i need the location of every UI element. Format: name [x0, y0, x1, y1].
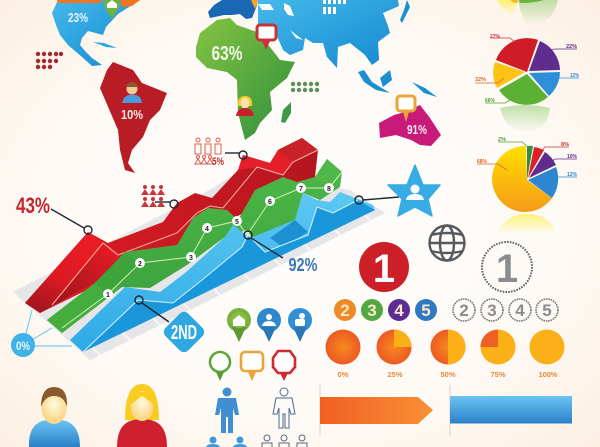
badge: 0% with leaders [11, 310, 72, 357]
numbered markers [103, 183, 334, 299]
numbered markers: 6 [268, 199, 272, 206]
colored numbers: 5 [421, 301, 431, 320]
south america [100, 62, 167, 173]
pie chart: five slices [475, 34, 579, 105]
pie labels: 66% [485, 98, 495, 104]
outlined numbers: 2 [459, 301, 469, 320]
australia [379, 105, 441, 146]
blue people row [206, 436, 247, 447]
numbered markers: 8 [327, 186, 331, 193]
arrow banner: orange [320, 397, 433, 424]
big red number 1: 1 [373, 247, 395, 291]
north america: 23% [68, 10, 88, 25]
badge: 0% with leaders: 0% [16, 339, 30, 353]
blue area [70, 192, 375, 352]
pie chart: yellow dominant [477, 137, 577, 212]
madagascar [281, 102, 291, 123]
colored numbers: 3 [367, 301, 377, 320]
avatar: man on south america [122, 82, 142, 103]
label 10%: 10% [121, 107, 143, 122]
pie labels: 12% [570, 73, 579, 79]
outlined numbers: 5 [542, 301, 552, 320]
numbered markers: 5 [235, 219, 239, 226]
avatar: woman on africa [236, 96, 254, 116]
dotted number 1: 1 [496, 247, 518, 291]
colored numbers: 2 [340, 301, 350, 320]
outline person icon [273, 388, 295, 428]
5% people group: 5% [212, 156, 224, 168]
outlined numbers: 3 [487, 301, 497, 320]
percent labels: 25% [388, 370, 403, 379]
5% people group [195, 138, 224, 168]
blue person pin [288, 308, 312, 342]
pie chart: top reflection [497, 0, 558, 25]
orange square pin [241, 352, 263, 381]
banner shadow lines [320, 385, 450, 436]
pie labels: 27% [490, 34, 500, 40]
label 92%: 92% [288, 255, 318, 275]
pie labels: 10% [567, 154, 577, 160]
blue person icon [215, 388, 239, 433]
blue people pin [257, 308, 281, 342]
world map [52, 0, 441, 173]
green home pin [227, 308, 251, 342]
green area [47, 159, 342, 333]
numbered markers: 1 [106, 292, 110, 299]
dots: red grid [36, 52, 63, 69]
pin on europe [251, 0, 258, 9]
pie labels: 22% [475, 77, 486, 83]
colored numbers: 4 [394, 301, 404, 320]
red people group [141, 185, 165, 207]
outline people row [262, 435, 307, 447]
pie labels: 12% [567, 172, 577, 178]
avatar: man [29, 387, 80, 447]
percent labels: 0% [338, 370, 349, 379]
red octagon pin [273, 351, 295, 381]
pie labels: 22% [566, 44, 577, 50]
dots: green stars [291, 82, 319, 92]
europe [208, 0, 258, 19]
globe icon [430, 226, 464, 260]
percent labels: 75% [490, 370, 506, 379]
numbered markers: 4 [205, 226, 209, 233]
pin on australia [397, 96, 415, 122]
star icon [388, 165, 440, 216]
badge: 2nd [161, 309, 207, 355]
label 43%: 43% [16, 193, 50, 218]
25 percent [376, 330, 412, 364]
pie reflection [500, 105, 550, 132]
asia [258, 0, 437, 97]
outlined numbers: 4 [515, 301, 525, 320]
0 percent [326, 330, 360, 364]
people icons on asia [323, 0, 346, 14]
outlined numbers [453, 299, 558, 321]
label 91%: 91% [407, 122, 427, 137]
label 63%: 63% [212, 43, 243, 65]
colored numbers [334, 299, 437, 321]
100 percent [530, 330, 564, 364]
big red number 1 [359, 242, 409, 292]
pie labels: 2% [498, 137, 506, 143]
green ring pin [210, 352, 230, 381]
percent labels: 50% [440, 370, 456, 379]
pie reflection [497, 214, 557, 234]
50 percent [430, 330, 466, 364]
numbered markers: 3 [189, 255, 193, 262]
numbered markers: 7 [299, 186, 303, 193]
north america [52, 0, 140, 66]
percent labels: 100% [538, 370, 558, 379]
numbered markers: 2 [138, 261, 142, 268]
pie labels: 68% [477, 159, 487, 165]
callout rings and leaders [51, 151, 399, 322]
grey base plane [13, 170, 385, 360]
badge: 2nd: 2ND [171, 322, 197, 344]
progress circles [326, 330, 564, 379]
pie labels [475, 34, 579, 104]
3D area chart [13, 138, 399, 360]
dotted number 1 [482, 242, 532, 292]
pin on africa [257, 25, 276, 50]
75 percent [480, 330, 516, 364]
africa [196, 18, 295, 140]
red area [25, 138, 318, 313]
banner: blue [450, 396, 572, 424]
pie labels [477, 137, 577, 178]
map pins [210, 308, 312, 381]
avatar: woman [117, 384, 167, 447]
pie labels: 8% [561, 142, 569, 148]
percent labels [338, 370, 558, 379]
